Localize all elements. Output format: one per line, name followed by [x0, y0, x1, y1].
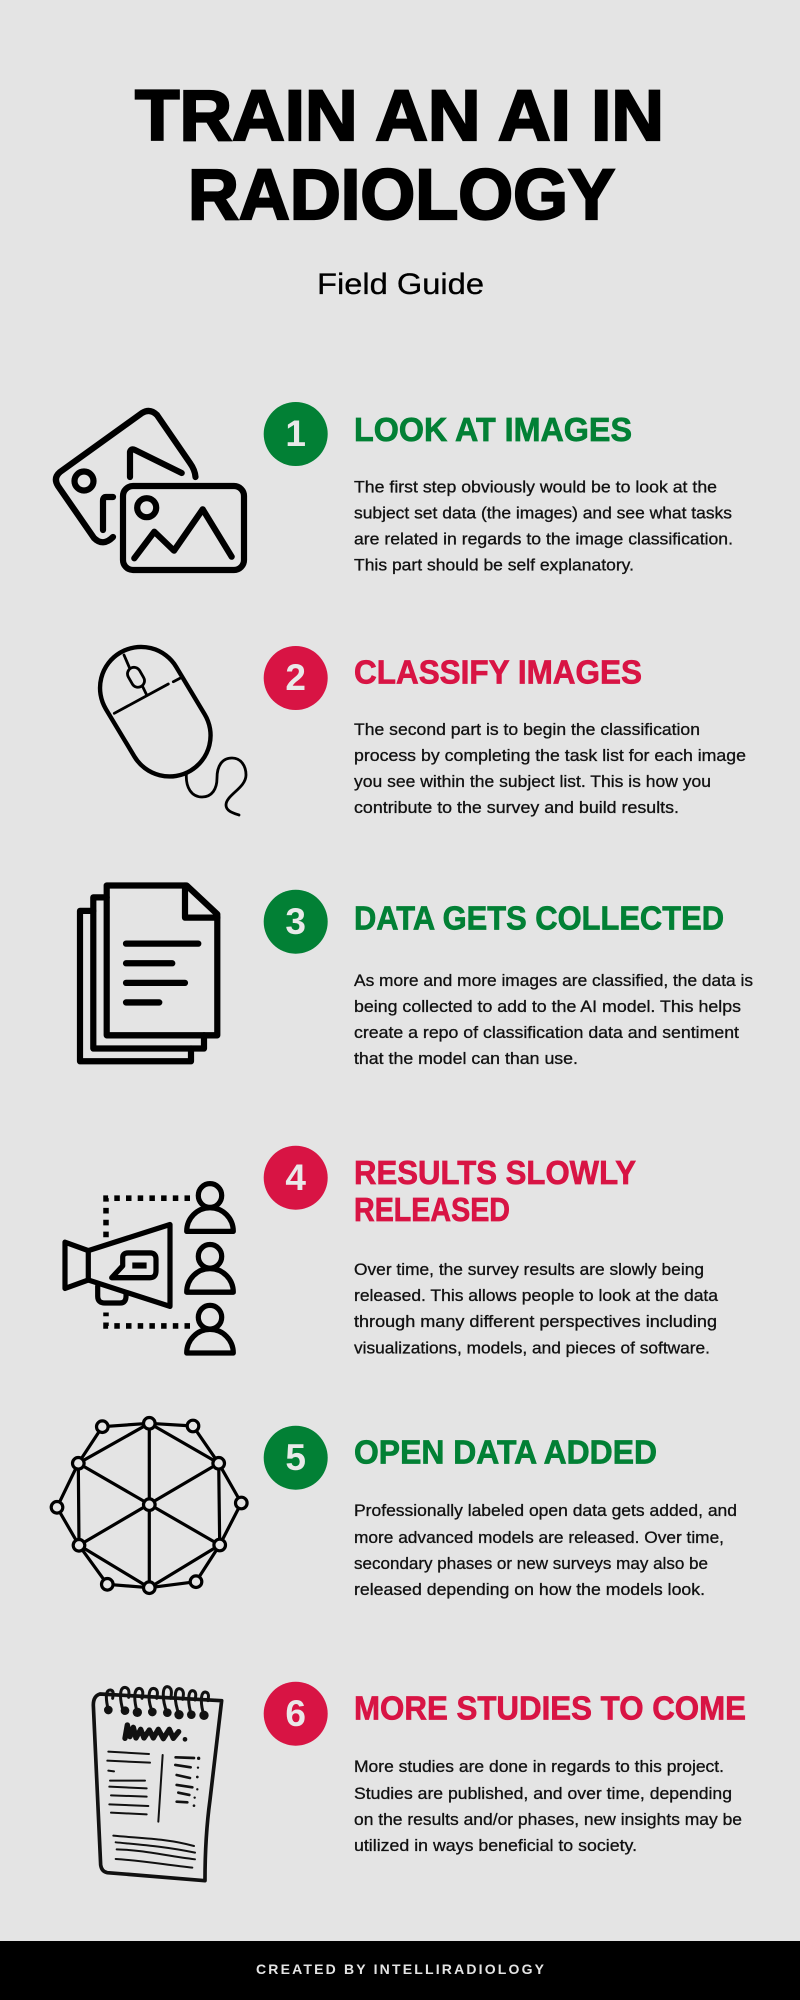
- number badge 5: 5: [285, 1437, 306, 1478]
- text block 1: are related in regards to the image classification.: [354, 531, 733, 549]
- title: [135, 77, 664, 235]
- title: RADIOLOGY: [188, 156, 615, 235]
- text block 1: subject set data (the images) and see what tasks: [354, 505, 732, 523]
- text block 3: [354, 972, 753, 1068]
- icon: computer mouse: [85, 632, 246, 815]
- panel: step 6: [93, 1682, 746, 1881]
- text block 6: More studies are done in regards to this project.: [354, 1758, 724, 1776]
- icon: network: [51, 1418, 247, 1593]
- heading 2: CLASSIFY IMAGES: [354, 654, 642, 691]
- text block 3: As more and more images are classified, the data is: [354, 972, 753, 990]
- text block 4: Over time, the survey results are slowly being: [354, 1261, 704, 1279]
- number badge 5: [264, 1426, 328, 1490]
- text block 5: secondary phases or new surveys may also be: [354, 1555, 708, 1573]
- text block 4: visualizations, models, and pieces of software.: [354, 1340, 710, 1358]
- subtitle: Field Guide: [317, 268, 484, 301]
- number badge 3: [264, 890, 328, 954]
- number badge 3: 3: [285, 901, 306, 942]
- text block 5: Professionally labeled open data gets added, and: [354, 1502, 737, 1520]
- number badge 4: [264, 1146, 328, 1210]
- number badge 4: 4: [285, 1157, 306, 1198]
- number badge 1: [264, 402, 328, 466]
- icon: megaphone and audience: [65, 1184, 233, 1353]
- icon: document stack: [80, 885, 217, 1061]
- text block 4: released. This allows people to look at the data: [354, 1287, 719, 1305]
- heading 4: RESULTS SLOWLY: [354, 1154, 636, 1191]
- number badge 6: [264, 1682, 328, 1746]
- panel: step 3: [80, 885, 753, 1068]
- number badge 2: 2: [285, 657, 306, 698]
- heading 4: [354, 1154, 636, 1228]
- text block 4: [354, 1261, 719, 1358]
- number badge 1: 1: [285, 413, 306, 454]
- text block 3: being collected to add to the AI model. This helps: [354, 998, 741, 1016]
- text block 2: [354, 721, 746, 817]
- text block 5: more advanced models are released. Over time,: [354, 1529, 724, 1547]
- text block 2: contribute to the survey and build results.: [354, 799, 679, 817]
- panel: step 2: [85, 632, 746, 817]
- text block 3: create a repo of classification data and sentiment: [354, 1024, 739, 1042]
- text block 1: This part should be self explanatory.: [354, 557, 634, 575]
- panel: step 1: [56, 402, 733, 575]
- number badge 6: 6: [285, 1693, 306, 1734]
- number badge 2: [264, 646, 328, 710]
- text block 1: The first step obviously would be to look at the: [354, 479, 717, 497]
- heading 3: DATA GETS COLLECTED: [354, 900, 724, 937]
- text block 6: utilized in ways beneficial to society.: [354, 1837, 637, 1855]
- text block 2: you see within the subject list. This is how you: [354, 773, 711, 791]
- title: TRAIN AN AI IN: [135, 77, 664, 156]
- text block 2: process by completing the task list for each image: [354, 747, 746, 765]
- heading 5: OPEN DATA ADDED: [354, 1434, 657, 1471]
- text block 6: [354, 1758, 742, 1855]
- text block 5: [354, 1502, 737, 1599]
- text block 4: through many different perspectives including: [354, 1313, 717, 1331]
- icon: photos: [56, 411, 244, 570]
- panel: step 5: [51, 1418, 737, 1599]
- text block 2: The second part is to begin the classification: [354, 721, 700, 739]
- footer bar: [0, 1941, 800, 2000]
- heading 1: LOOK AT IMAGES: [354, 411, 632, 448]
- text block 6: on the results and/or phases, new insights may be: [354, 1811, 742, 1829]
- text block 1: [354, 479, 733, 575]
- icon: notepad sketch: [93, 1687, 222, 1881]
- panel: step 4: [65, 1146, 719, 1358]
- text block 3: that the model can than use.: [354, 1050, 578, 1068]
- text block 5: released depending on how the models look.: [354, 1581, 705, 1599]
- text block 6: Studies are published, and over time, depending: [354, 1785, 732, 1803]
- footer credit: CREATED BY INTELLIRADIOLOGY: [256, 1961, 545, 1977]
- heading 6: MORE STUDIES TO COME: [354, 1690, 746, 1727]
- heading 4: RELEASED: [354, 1191, 510, 1228]
